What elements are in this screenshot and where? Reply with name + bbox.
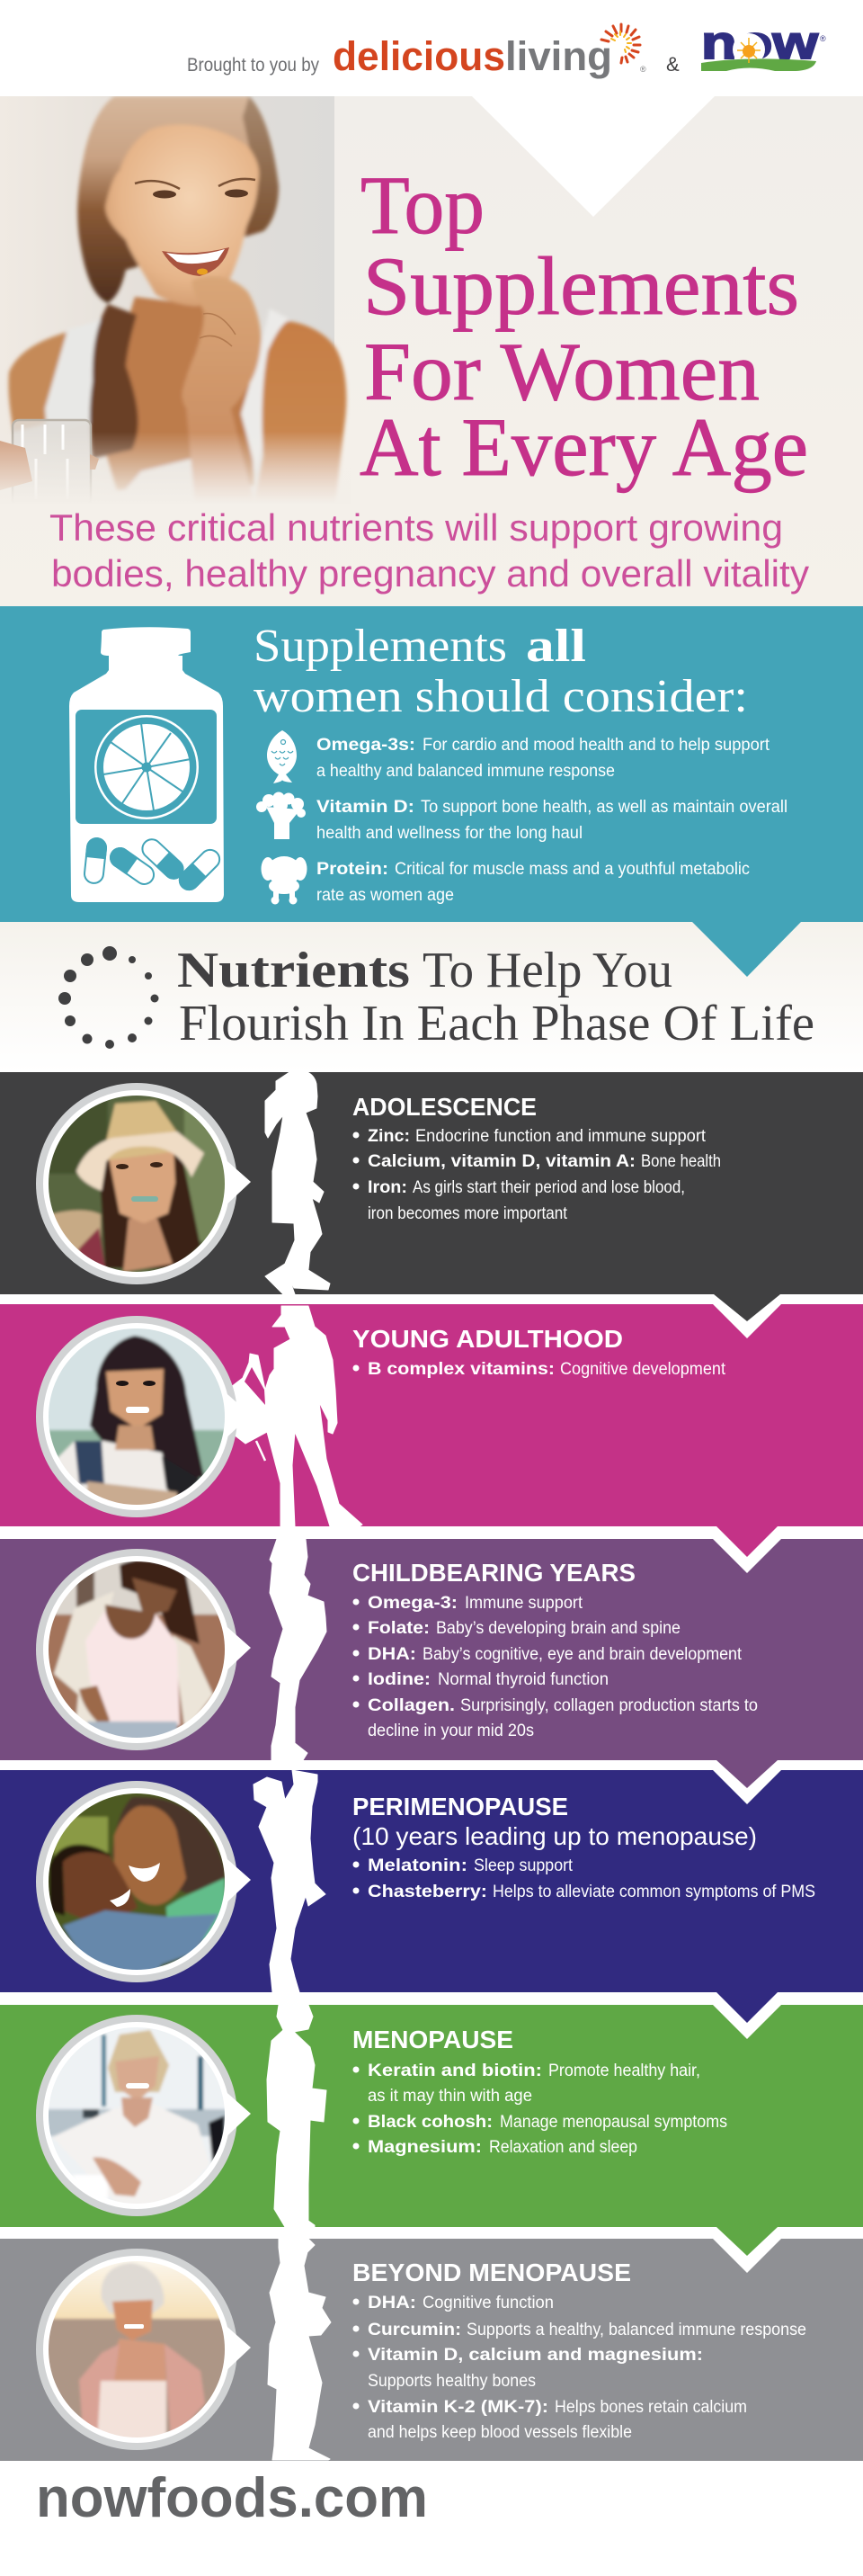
childbearing years nutrients: Immune support [465, 1594, 583, 1613]
band: beyond menopause [0, 2239, 863, 2461]
childbearing years nutrients: DHA: [368, 1645, 416, 1664]
subtitle [49, 506, 809, 595]
heading: nutrients to help you flourish: To Help You [423, 943, 672, 998]
menopause nutrients: Magnesium: [368, 2138, 482, 2157]
menopause nutrients: Promote healthy hair, [548, 2062, 700, 2080]
childbearing years nutrients: Omega-3: [368, 1594, 458, 1613]
perimenopause nutrients: Helps to alleviate common symptoms of PMS [493, 1883, 815, 1901]
beyond menopause nutrients: Cognitive function [423, 2294, 554, 2312]
silhouette: pregnant woman [270, 1539, 326, 1760]
adolescence nutrients: Bone health [641, 1152, 721, 1171]
omega-3s text [316, 736, 770, 781]
band: childbearing years [0, 1539, 863, 1760]
capsule 1 [83, 836, 108, 884]
menopause nutrients: Black cohosh: [368, 2113, 493, 2132]
adolescence heading: ADOLESCENCE [352, 1093, 537, 1121]
subtitle: bodies, healthy pregnancy and overall vitality [51, 552, 809, 595]
protein text [316, 860, 750, 905]
perimenopause nutrients: Chasteberry: [368, 1883, 487, 1901]
white notch [472, 96, 715, 217]
icon: broccoli [256, 792, 306, 839]
portrait: older woman [36, 2249, 251, 2450]
omega-3s text: For cardio and mood health and to help support [423, 736, 770, 755]
menopause nutrients: Relaxation and sleep [489, 2138, 637, 2157]
band: menopause [0, 2005, 863, 2227]
notch [692, 922, 801, 977]
icon: supplement bottle [69, 627, 224, 902]
heading: supplements all women should consider: all [526, 621, 586, 672]
beyond menopause nutrients: Helps bones retain calcium [555, 2398, 747, 2417]
adolescence nutrients: Calcium, vitamin D, vitamin A: [368, 1152, 636, 1171]
logo: NOW: now [701, 17, 819, 69]
protein text: Protein: [316, 860, 388, 879]
perimenopause heading [352, 1793, 757, 1850]
childbearing years nutrients: Baby’s cognitive, eye and brain development [423, 1645, 743, 1664]
capsule 2 [105, 844, 158, 889]
ampersand: & [666, 53, 680, 76]
portrait: teen in hat [36, 1083, 251, 1284]
childbearing years nutrients [352, 1594, 758, 1740]
drinking glass [0, 419, 99, 493]
chevrons between bands [713, 1294, 781, 2273]
silhouette: young adult with bag [227, 1306, 362, 1526]
logo: delicious living: ® [640, 65, 646, 74]
perimenopause nutrients [352, 1856, 815, 1901]
protein text: Critical for muscle mass and a youthful metabolic [395, 860, 750, 879]
heading: supplements all women should consider: women should consider: [254, 671, 748, 722]
vitamin d text: To support bone health, as well as maintain overall [421, 798, 787, 817]
beyond menopause nutrients [352, 2294, 806, 2442]
panel: supplements all women should consider [0, 606, 863, 977]
young adulthood heading: YOUNG ADULTHOOD [352, 1325, 623, 1353]
childbearing years nutrients: Collagen. [368, 1696, 455, 1715]
heading: supplements all women should consider [254, 621, 748, 722]
perimenopause nutrients: Melatonin: [368, 1856, 467, 1875]
panel: hero background [0, 96, 863, 606]
title: For Women [364, 326, 760, 417]
vitamin d text: health and wellness for the long haul [316, 824, 583, 843]
logo: NOW: ® [820, 34, 826, 43]
beyond menopause nutrients: Supports healthy bones [368, 2372, 536, 2391]
silhouette: adolescent girl [265, 1072, 330, 1294]
band: adolescence [0, 1072, 863, 1294]
heading: nutrients to help you flourish: Flourish In Each Phase Of Life [179, 996, 814, 1051]
logo: delicious living: delicious [333, 33, 505, 79]
adolescence nutrients: As girls start their period and lose blood, [413, 1178, 685, 1197]
beyond menopause nutrients: Vitamin D, calcium and magnesium: [368, 2346, 703, 2365]
band: young adulthood [0, 1304, 863, 1526]
logo: delicious living [333, 24, 646, 79]
vitamin d text [316, 798, 787, 843]
capsule 4 [174, 845, 224, 895]
menopause nutrients [352, 2062, 727, 2157]
omega-3s text: a healthy and balanced immune response [316, 762, 615, 781]
perimenopause heading: PERIMENOPAUSE [352, 1793, 568, 1820]
childbearing years nutrients: Surprisingly, collagen production starts to [460, 1696, 758, 1715]
brought to you by: Brought to you by [187, 55, 319, 76]
childbearing years nutrients: Normal thyroid function [438, 1670, 609, 1689]
beyond menopause nutrients: Curcumin: [368, 2321, 461, 2339]
adolescence nutrients: Zinc: [368, 1127, 410, 1146]
photo: woman taking a supplement [0, 96, 351, 505]
childbearing years nutrients: Baby’s developing brain and spine [436, 1619, 681, 1638]
menopause heading: MENOPAUSE [352, 2026, 513, 2053]
adolescence nutrients [352, 1127, 721, 1223]
logo: delicious living: living [505, 33, 612, 79]
heading: nutrients to help you flourish: Nutrients [177, 943, 410, 998]
beyond menopause nutrients: Vitamin K-2 (MK-7): [368, 2398, 548, 2417]
heading: nutrients to help you flourish [177, 943, 814, 1051]
portrait: mother and daughter [36, 1781, 251, 1982]
perimenopause nutrients: Sleep support [474, 1856, 574, 1875]
childbearing years heading: CHILDBEARING YEARS [352, 1559, 636, 1587]
young adulthood nutrients: Cognitive development [560, 1360, 726, 1379]
young adulthood nutrients [352, 1360, 726, 1379]
title: At Every Age [360, 401, 808, 493]
portrait: pregnant woman [36, 1549, 251, 1750]
menopause nutrients: Manage menopausal symptoms [500, 2113, 727, 2132]
beyond menopause nutrients: DHA: [368, 2294, 416, 2312]
capsule 3 [138, 835, 188, 884]
adolescence nutrients: Iron: [368, 1178, 407, 1197]
silhouette: older woman with bag [268, 2239, 331, 2460]
title: Top [360, 159, 485, 251]
footer url: nowfoods.com [36, 2467, 428, 2529]
omega-3s text: Omega-3s: [316, 736, 415, 755]
header: sponsors [187, 17, 826, 79]
beyond menopause nutrients: Supports a healthy, balanced immune response [467, 2321, 806, 2339]
icon: turkey [261, 856, 307, 905]
young adulthood nutrients: B complex vitamins: [368, 1360, 555, 1379]
heading: supplements all women should consider: Supplements [254, 621, 507, 672]
icon: fish [267, 730, 297, 783]
portrait: menopause woman [36, 2015, 251, 2216]
icon: ring of dots [58, 946, 158, 1049]
adolescence nutrients: Endocrine function and immune support [415, 1127, 707, 1146]
silhouette: woman with child [254, 1770, 325, 1992]
perimenopause heading: (10 years leading up to menopause) [352, 1822, 757, 1850]
band: perimenopause [0, 1770, 863, 1992]
menopause nutrients: Keratin and biotin: [368, 2062, 542, 2080]
title [360, 159, 808, 493]
childbearing years nutrients: Folate: [368, 1619, 430, 1638]
title: Supplements [363, 240, 799, 332]
childbearing years nutrients: Iodine: [368, 1670, 431, 1689]
subtitle: These critical nutrients will support growing [49, 506, 783, 549]
beyond menopause heading: BEYOND MENOPAUSE [352, 2258, 631, 2286]
panel: nutrients heading background [0, 922, 863, 1072]
childbearing years nutrients: decline in your mid 20s [368, 1722, 534, 1740]
protein text: rate as women age [316, 886, 454, 905]
portrait: young adult [36, 1316, 251, 1517]
menopause nutrients: as it may thin with age [368, 2087, 532, 2106]
beyond menopause nutrients: and helps keep blood vessels flexible [368, 2423, 632, 2442]
silhouette: woman with folder [267, 2005, 326, 2227]
vitamin d text: Vitamin D: [316, 798, 414, 817]
adolescence nutrients: iron becomes more important [368, 1204, 568, 1223]
